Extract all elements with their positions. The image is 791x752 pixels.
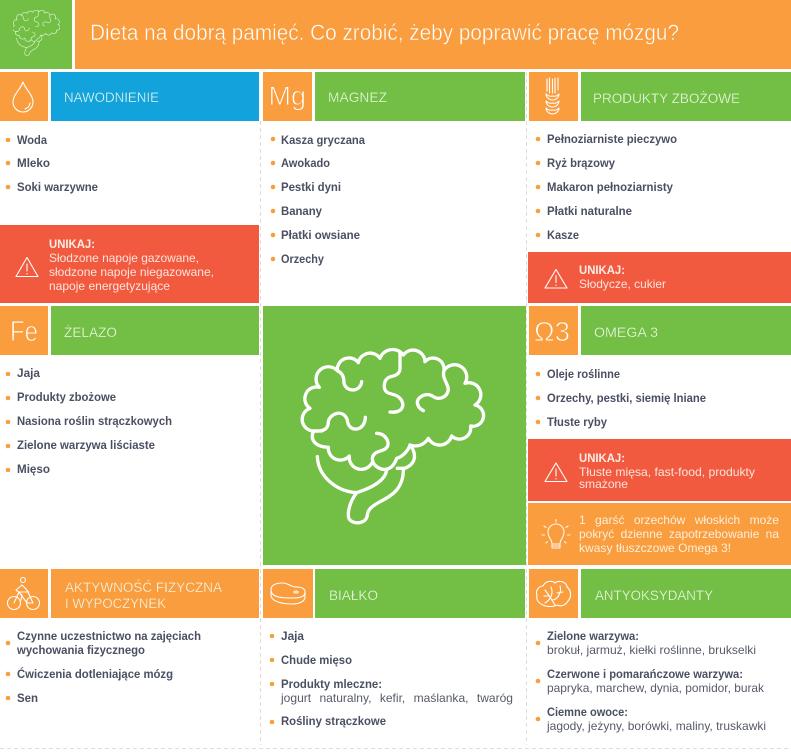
list: aktywnosc fizyczna: wychowania fizycznego — [16, 643, 145, 657]
callout: walnut tip: 1 garść orzechów włoskich może — [579, 513, 779, 527]
panel: aktywnosc fizyczna — [0, 569, 259, 705]
list: zelazo: Zielone warzywa liściaste — [17, 438, 155, 452]
icon: small brain — [13, 10, 60, 56]
panel: aktywnosc fizyczna: I WYPOCZYNEK — [65, 595, 167, 611]
heading: omega 3: OMEGA 3 — [594, 324, 658, 340]
callout: unikaj tluste: UNIKAJ: — [579, 451, 625, 465]
callout: unikaj tluste — [528, 439, 791, 501]
heading: aktywnosc fizyczna: AKTYWNOŚĆ FIZYCZNA — [65, 578, 223, 595]
list: produkty zbozowe: Pełnoziarniste pieczywo — [547, 132, 677, 146]
panel: nawodnienie — [0, 72, 259, 303]
list: magnez: Awokado — [281, 156, 330, 170]
list: produkty zbozowe: Makaron pełnoziarnisty — [547, 180, 673, 194]
list: produkty zbozowe: Kasze — [547, 228, 579, 242]
panel: bialko — [263, 569, 525, 728]
list: nawodnienie — [6, 133, 98, 194]
list: antyoksydanty: jagody, jeżyny, borówki, maliny, truskawki — [546, 719, 766, 733]
list: bialko: jogurt naturalny, kefir, maślanka, twaróg — [280, 691, 513, 705]
icon: wheat — [546, 78, 559, 114]
panel: central brain — [263, 306, 526, 565]
icon: warning — [16, 258, 38, 276]
heading: produkty zbozowe: PRODUKTY ZBOŻOWE — [593, 89, 740, 106]
list: magnez: Orzechy — [281, 252, 324, 266]
callout: unikaj napoje: Słodzone napoje gazowane, — [49, 251, 199, 265]
list: nawodnienie: Woda — [17, 133, 47, 147]
heading: nawodnienie: NAWODNIENIE — [64, 89, 159, 105]
callout: unikaj tluste: Tłuste mięsa, fast-food, produkty — [579, 465, 755, 479]
callout: unikaj slodycze: Słodycze, cukier — [579, 277, 666, 291]
list: bialko: Jaja — [281, 629, 304, 643]
list: nawodnienie: Soki warzywne — [17, 180, 98, 194]
list: aktywnosc fizyczna: Sen — [17, 691, 38, 705]
panel: produkty zbozowe — [528, 72, 791, 303]
list: zelazo: Jaja — [17, 366, 40, 380]
list: zelazo: Nasiona roślin strączkowych — [17, 414, 172, 428]
panel: magnez — [263, 72, 525, 266]
icon: Mg symbol: Mg — [268, 81, 306, 111]
title text: Dieta na dobrą pamięć. Co zrobić, żeby poprawić pracę mózgu? — [90, 20, 679, 45]
callout: walnut tip — [528, 503, 791, 565]
icon: light bulb — [542, 520, 570, 548]
list: aktywnosc fizyczna: Czynne uczestnictwo na zajęciach — [17, 629, 201, 643]
list: omega 3: Oleje roślinne — [547, 367, 620, 381]
list: produkty zbozowe — [536, 132, 677, 242]
list: antyoksydanty: brokuł, jarmuż, kiełki roślinne, brukselki — [547, 643, 756, 657]
callout: unikaj slodycze: UNIKAJ: — [579, 263, 625, 277]
title banner — [0, 0, 791, 69]
list: zelazo — [6, 366, 172, 476]
icon: cabbage — [536, 581, 571, 606]
list: aktywnosc fizyczna: Ćwiczenia dotleniające mózg — [17, 666, 173, 681]
list: magnez: Płatki owsiane — [281, 228, 360, 242]
list: omega 3: Tłuste ryby — [547, 415, 607, 429]
panel: antyoksydanty — [529, 569, 791, 733]
panel: omega 3 — [528, 306, 791, 565]
heading: magnez: MAGNEZ — [328, 89, 387, 105]
list: bialko — [270, 629, 513, 728]
list: magnez: Pestki dyni — [281, 180, 341, 194]
list: bialko: Produkty mleczne: — [281, 677, 382, 691]
list: magnez: Banany — [281, 204, 322, 218]
list: produkty zbozowe: Ryż brązowy — [547, 156, 615, 170]
list: magnez — [271, 133, 365, 266]
callout: walnut tip: pokryć dzienne zapotrzebowanie na — [579, 527, 779, 541]
icon: steak — [271, 583, 305, 604]
list: produkty zbozowe: Płatki naturalne — [547, 204, 632, 218]
list: omega 3: Orzechy, pestki, siemię lniane — [547, 391, 706, 405]
icon: warning — [545, 463, 567, 482]
panel: zelazo — [0, 306, 259, 476]
icon: warning — [545, 270, 567, 288]
list: bialko: Rośliny strączkowe — [281, 714, 386, 728]
callout: walnut tip: kwasy tłuszczowe Omega 3! — [579, 541, 731, 555]
callout: unikaj slodycze — [528, 252, 791, 303]
icon: water drop — [13, 82, 33, 112]
icon: large brain — [300, 348, 486, 524]
list: antyoksydanty — [536, 629, 766, 733]
icon: omega 3 symbol: Ω3 — [534, 316, 570, 347]
heading: zelazo: ŻELAZO — [64, 323, 117, 340]
heading: antyoksydanty: ANTYOKSYDANTY — [595, 587, 714, 603]
list: antyoksydanty: Czerwone i pomarańczowe warzywa: — [547, 667, 743, 681]
callout: unikaj napoje — [0, 225, 259, 303]
list: antyoksydanty: Zielone warzywa: — [547, 629, 639, 643]
list: magnez: Kasza gryczana — [281, 133, 365, 147]
list: zelazo: Mięso — [17, 462, 50, 476]
list: bialko: Chude mięso — [281, 653, 352, 667]
icon: Fe symbol: Fe — [10, 316, 38, 348]
heading: bialko: BIAŁKO — [329, 587, 378, 603]
callout: unikaj tluste: smażone — [579, 477, 628, 491]
list: antyoksydanty: Ciemne owoce: — [547, 705, 628, 719]
callout: unikaj napoje: napoje energetyzujące — [49, 279, 170, 293]
callout: unikaj napoje: UNIKAJ: — [49, 237, 95, 251]
list: antyoksydanty: papryka, marchew, dynia, pomidor, burak — [547, 681, 765, 695]
list: nawodnienie: Mleko — [17, 156, 50, 170]
list: omega 3 — [536, 367, 706, 429]
callout: unikaj napoje: słodzone napoje niegazowane, — [49, 265, 214, 279]
list: zelazo: Produkty zbożowe — [17, 390, 116, 404]
icon: cyclist — [8, 578, 40, 610]
list: aktywnosc fizyczna — [6, 629, 201, 705]
